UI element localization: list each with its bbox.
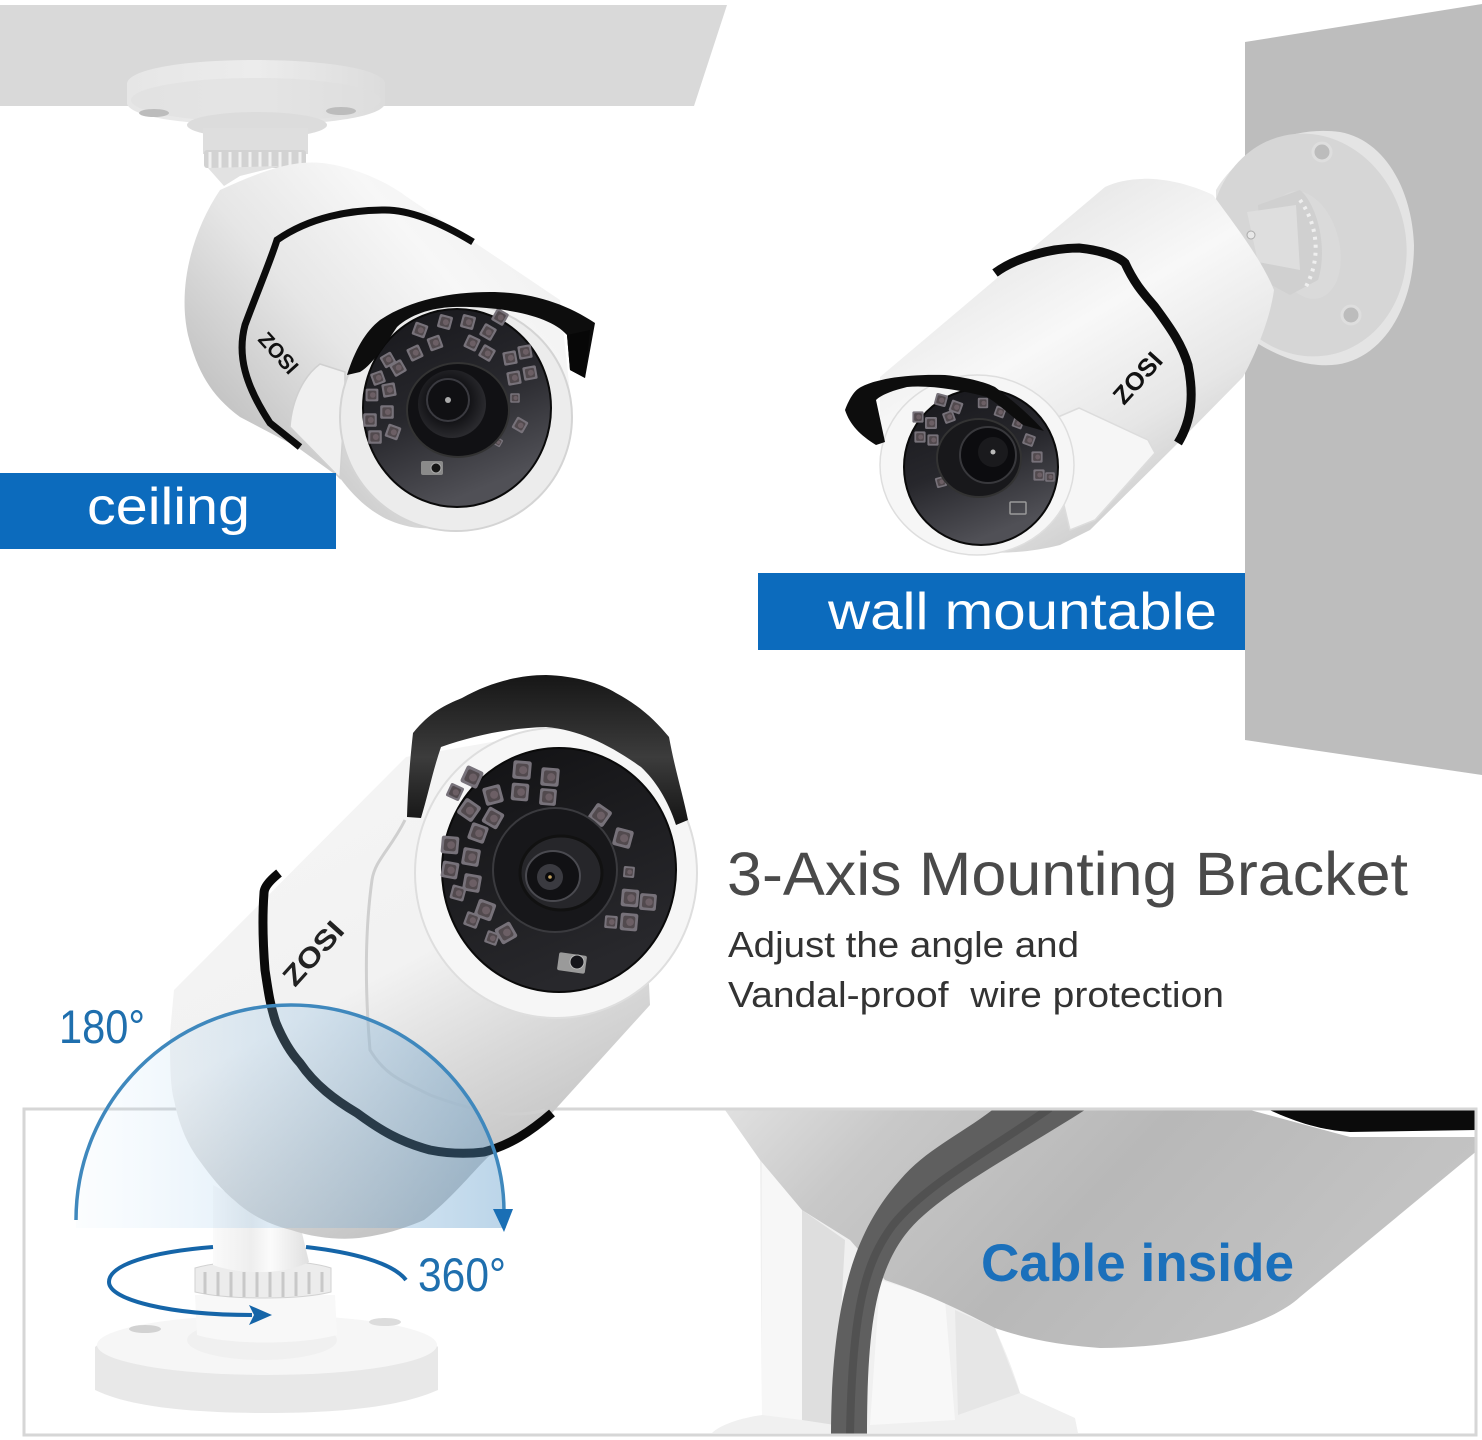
tilt arc bbox=[76, 1005, 504, 1220]
360 degree pan indicator bbox=[109, 1247, 506, 1325]
tilt arrowhead bbox=[493, 1209, 513, 1232]
label: ceiling bbox=[0, 473, 336, 549]
360 label: 360° bbox=[418, 1248, 506, 1301]
light sensor bbox=[421, 461, 443, 475]
label: ceiling: ceiling bbox=[87, 478, 250, 536]
base disk bbox=[95, 1315, 438, 1413]
front ring bbox=[415, 728, 697, 1018]
lens bbox=[937, 419, 1021, 497]
description text bbox=[728, 924, 1224, 1015]
light sensor bbox=[557, 952, 587, 974]
IR LEDs bbox=[912, 393, 1055, 488]
brand label: ZOSI bbox=[1108, 347, 1169, 410]
heading: 3-Axis Mounting Bracket bbox=[727, 840, 1408, 908]
shoulder seam bbox=[366, 820, 545, 1114]
180 degree tilt indicator bbox=[59, 1000, 513, 1232]
camera body bbox=[170, 730, 650, 1239]
dark face bbox=[363, 309, 551, 507]
pan arrowhead bbox=[249, 1305, 272, 1325]
band bbox=[242, 210, 473, 447]
brand label: ZOSI bbox=[276, 915, 350, 992]
lens bbox=[493, 808, 617, 932]
camera body bbox=[880, 179, 1274, 553]
light sensor bbox=[1010, 502, 1026, 514]
wall mount bracket bbox=[1189, 115, 1427, 375]
dark face bbox=[904, 389, 1058, 545]
close-up artwork bbox=[712, 1108, 1478, 1436]
dark face bbox=[442, 748, 676, 992]
shoulder seam bbox=[290, 364, 345, 478]
band bbox=[995, 248, 1191, 443]
camera underside bbox=[725, 1110, 1478, 1348]
IR LEDs bbox=[363, 308, 538, 447]
wall background bbox=[1245, 4, 1482, 775]
ceiling background bbox=[0, 5, 727, 106]
lens bbox=[407, 363, 509, 457]
base collar bbox=[195, 1260, 337, 1342]
black band bbox=[1270, 1110, 1474, 1132]
visor bbox=[407, 675, 688, 825]
ceiling mount bracket bbox=[127, 60, 385, 186]
front ring bbox=[880, 375, 1074, 555]
description text: Vandal-proof wire protection bbox=[728, 974, 1224, 1015]
cable inside label: Cable inside bbox=[981, 1234, 1294, 1293]
front ring bbox=[340, 303, 572, 531]
brand label: ZOSI bbox=[253, 328, 302, 379]
panel frame bbox=[24, 1109, 1476, 1435]
frame redraw bbox=[24, 1109, 1476, 1435]
tilt sweep fill bbox=[76, 1005, 506, 1228]
camera: wall mounted bbox=[845, 115, 1427, 555]
180 label: 180° bbox=[59, 1000, 145, 1053]
shoulder seam bbox=[1044, 408, 1155, 530]
camera body bbox=[185, 163, 573, 528]
visor bbox=[845, 375, 1044, 445]
pan arc bbox=[109, 1247, 406, 1315]
camera: ceiling mounted bbox=[127, 60, 595, 531]
label: wall mountable: wall mountable bbox=[827, 583, 1217, 641]
bracket post close-up bbox=[712, 1160, 1078, 1433]
panel: cable inside bbox=[24, 1108, 1478, 1436]
support post bbox=[213, 1185, 309, 1272]
band bbox=[263, 873, 552, 1153]
label: wall mountable bbox=[758, 573, 1245, 650]
cable bbox=[831, 1108, 1088, 1436]
description text: Adjust the angle and bbox=[728, 924, 1079, 965]
visor bbox=[347, 292, 595, 378]
IR LEDs bbox=[440, 760, 657, 946]
camera: 3-axis adjustable bbox=[95, 675, 697, 1413]
